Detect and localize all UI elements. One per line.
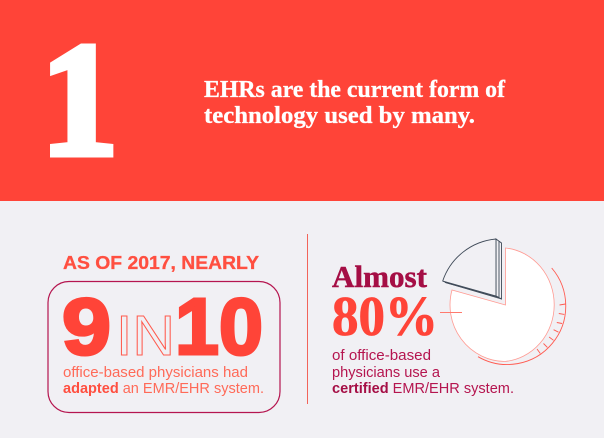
divider: [307, 234, 308, 404]
pie leader line: [440, 312, 462, 313]
outlined word IN: IN: [116, 304, 175, 368]
panel: 9 in 10 statistic: [48, 253, 280, 412]
pie large slice: [450, 248, 554, 362]
rounded statistic box: [48, 282, 280, 412]
caption: [332, 347, 514, 397]
heading: technology used by many.: [204, 103, 475, 129]
word Almost: Almost: [332, 259, 428, 294]
caption: of office-based: [332, 347, 431, 364]
label: as of 2017: AS OF 2017, NEARLY: [63, 253, 259, 273]
pie edge offset with hatching: [478, 268, 566, 365]
panel: 80 percent statistic: [332, 259, 514, 397]
heading: EHRs are the current form of: [204, 77, 506, 103]
caption: certified EMR/EHR system.: [332, 380, 514, 397]
number 80%: 80%: [332, 286, 438, 348]
panel: red header band: [0, 0, 604, 201]
number 10: 10: [175, 282, 263, 371]
heading: [204, 77, 506, 129]
large numeral 1: 1: [41, 11, 118, 190]
caption: [63, 364, 264, 397]
number 9: 9: [62, 282, 111, 371]
caption: office-based physicians had: [63, 364, 248, 381]
icon: pie chart: [440, 239, 566, 365]
pie removed slice: [443, 239, 502, 299]
caption: physicians use a: [332, 364, 441, 381]
caption: adapted an EMR/EHR system.: [63, 380, 264, 397]
